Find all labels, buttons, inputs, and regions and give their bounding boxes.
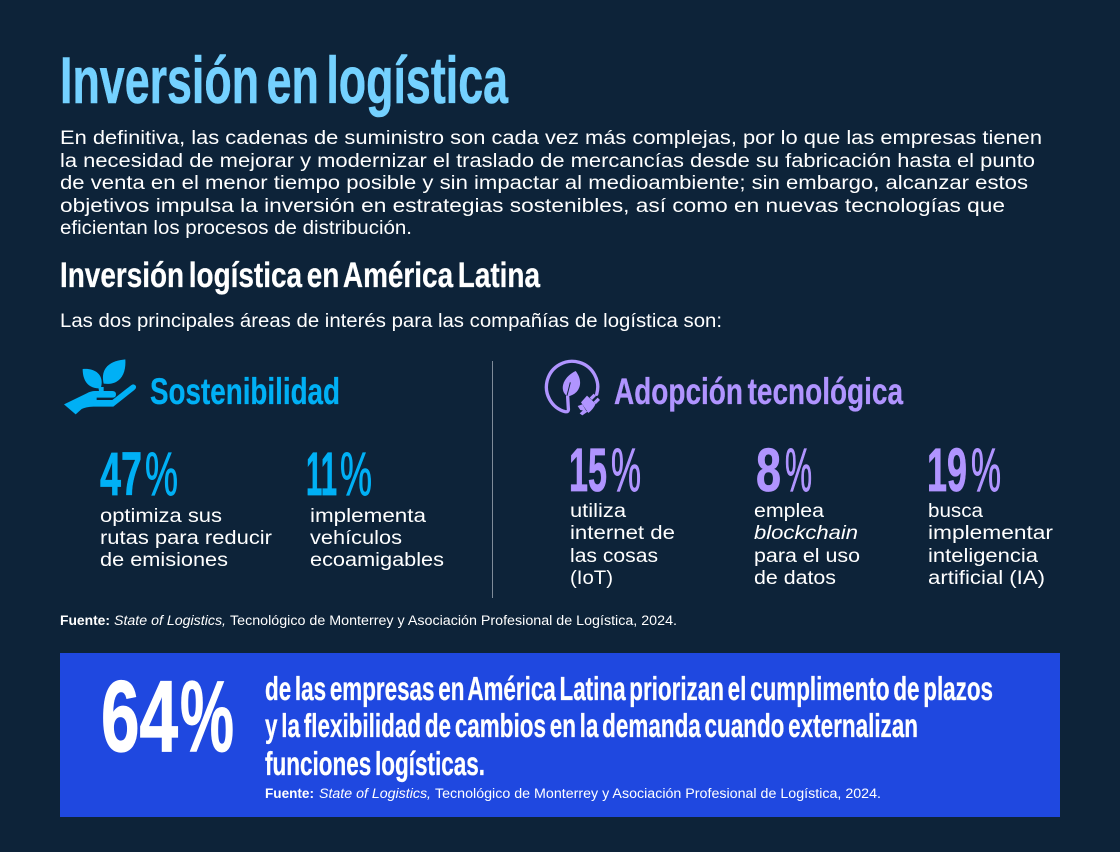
title: Inversión en logística	[60, 43, 509, 117]
heading: Adopción tecnológica: Adopción tecnológica	[614, 371, 903, 412]
stat: 47%	[100, 440, 273, 571]
callout source: Tecnológico de Monterrey y Asociación Profesional de Logística, 2024.	[435, 786, 881, 801]
callout source	[265, 786, 881, 801]
panel: adopción tecnológica	[546, 361, 1054, 589]
icon: hand with plant	[64, 359, 136, 414]
stat: 19%: implementar	[928, 523, 1054, 544]
icon: leaf with plug	[546, 361, 600, 415]
source note	[60, 613, 677, 628]
stat: 19%: inteligencia	[928, 546, 1038, 567]
stat: 8%: blockchain	[754, 523, 858, 544]
stat: 8%: emplea	[754, 501, 824, 522]
callout text	[265, 670, 993, 782]
stat: 8%: de datos	[754, 568, 836, 589]
big number: 64	[101, 661, 178, 773]
stat: 8%	[754, 436, 860, 589]
stat: 15%	[569, 436, 675, 589]
stat: 19%: artificial (IA)	[928, 568, 1045, 589]
stat: 8%: %	[785, 436, 812, 504]
stat: 15%: (IoT)	[570, 568, 613, 589]
intro paragraph: de venta en el menor tiempo posible y sin impactar al medioambiente; sin embargo, alcanzar estos	[60, 173, 1028, 194]
stat: 15%: 15	[569, 436, 607, 504]
big number: %	[180, 661, 234, 773]
source note: Fuente:	[60, 613, 110, 628]
stat: 11%: vehículos	[310, 528, 402, 549]
stat: 11%: implementa	[310, 506, 427, 527]
intro paragraph: objetivos impulsa la inversión en estrategias sostenibles, así como en nuevas tecnologías que	[60, 196, 1005, 217]
source note: State of Logistics,	[114, 613, 226, 628]
stat: 11%	[306, 440, 444, 571]
intro sentence: Las dos principales áreas de interés para las compañías de logística son:	[60, 311, 722, 332]
stat: 47%: %	[145, 440, 178, 508]
stat: 11%: 11	[306, 440, 337, 508]
source note: Tecnológico de Monterrey y Asociación Profesional de Logística, 2024.	[230, 613, 677, 628]
stat: 47%: 47	[100, 440, 142, 508]
callout source: Fuente:	[265, 786, 314, 801]
stat: 47%: rutas para reducir	[100, 528, 273, 549]
stat: 47%: de emisiones	[100, 550, 228, 571]
stat: 15%: las cosas	[570, 546, 658, 567]
stat: 15%: internet de	[570, 523, 675, 544]
intro paragraph: eficientan los procesos de distribución.	[60, 218, 412, 239]
panel: sostenibilidad	[64, 359, 444, 571]
callout source: State of Logistics,	[319, 786, 431, 801]
stat: 19%: 19	[927, 436, 967, 504]
stat: 8%: para el uso	[754, 546, 860, 567]
stat: 15%: utiliza	[570, 501, 626, 522]
stat: 11%: %	[340, 440, 372, 508]
stat: 47%: optimiza sus	[100, 506, 222, 527]
stat: 19%: %	[971, 436, 1001, 504]
stat: 15%: %	[611, 436, 641, 504]
intro paragraph: En definitiva, las cadenas de suministro son cada vez más complejas, por lo que las empresas tienen	[60, 128, 1042, 149]
stat: 19%: busca	[928, 501, 983, 522]
subheading: Inversión logística en América Latina	[60, 256, 540, 295]
callout text: funciones logísticas.	[265, 745, 485, 782]
intro paragraph	[60, 128, 1042, 239]
callout: 64%	[60, 653, 1060, 817]
heading: Sostenibilidad: Sostenibilidad	[150, 371, 340, 412]
stat: 8%: 8	[756, 436, 781, 504]
stat: 11%: ecoamigables	[310, 550, 444, 571]
intro paragraph: la necesidad de mejorar y modernizar el traslado de mercancías desde su fabricación hasta el punto	[60, 151, 1035, 172]
stat: 19%	[927, 436, 1054, 589]
